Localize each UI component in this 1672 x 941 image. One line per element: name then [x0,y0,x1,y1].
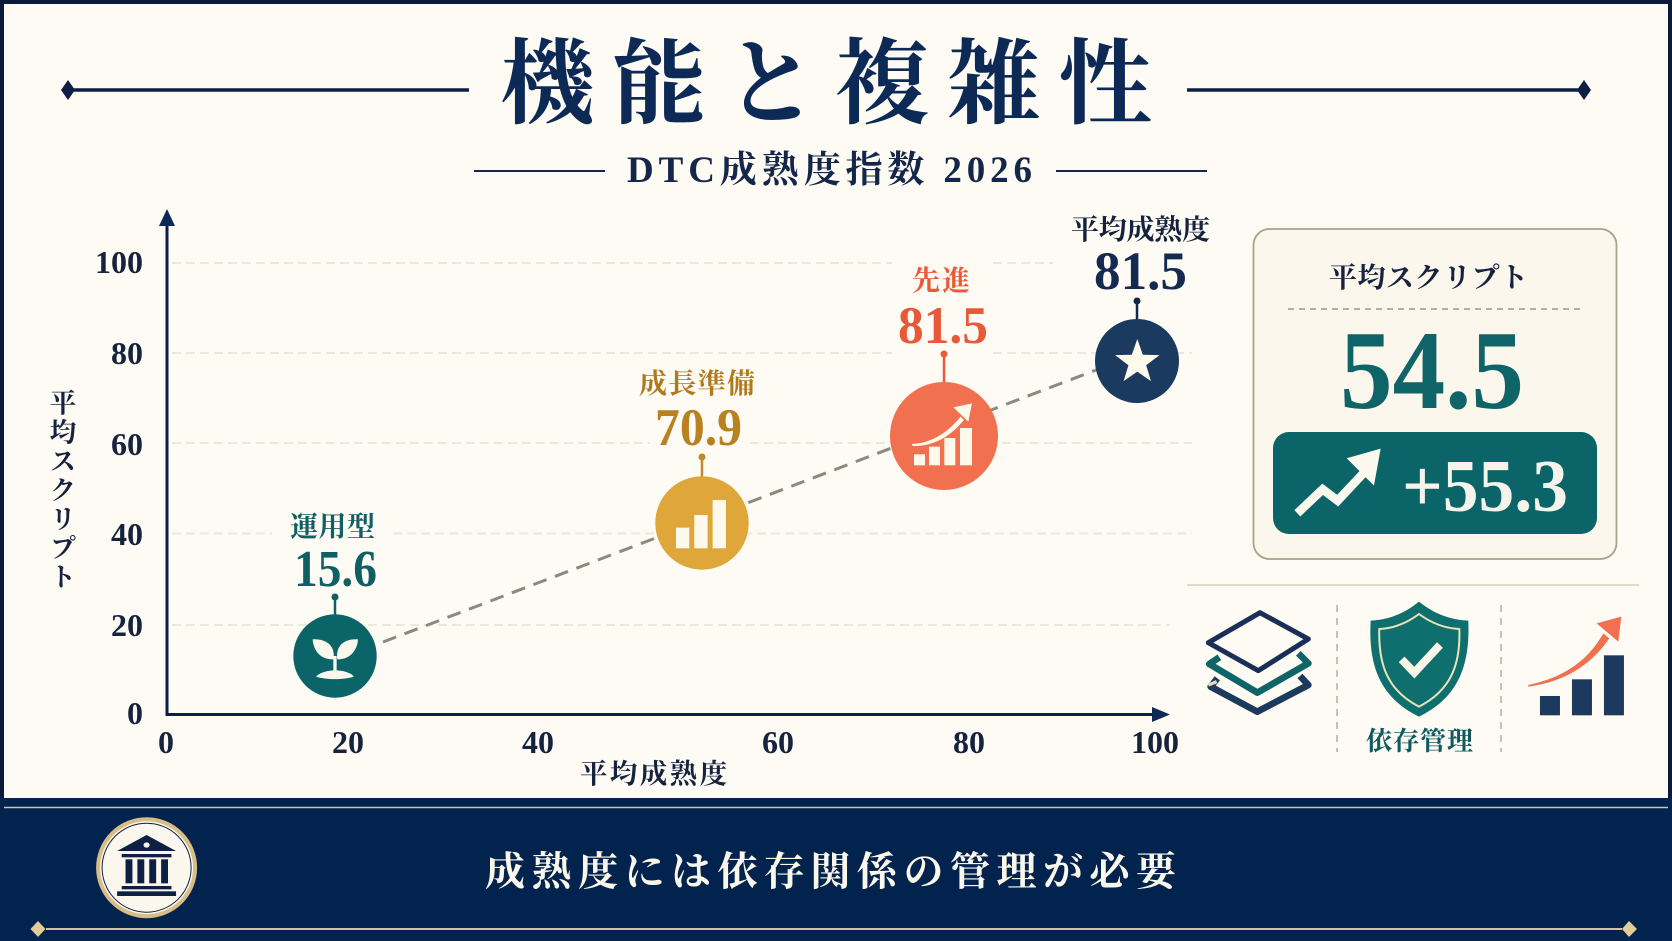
x tick labels: 20 [332,724,364,760]
icon: stacked layers [1208,613,1308,712]
label: operational: 運用型 [290,505,375,545]
y tick labels: 40 [111,516,143,552]
x tick labels: 100 [1131,724,1179,760]
y tick labels: 60 [111,426,143,462]
trend line [383,370,1096,642]
x axis title: 平均成熟度 [580,751,727,791]
y tick labels: 80 [111,335,143,371]
y tick labels: 20 [111,607,143,643]
y tick labels: 0 [127,695,143,731]
icon: trend arrow [1297,449,1381,513]
x tick labels: 60 [762,724,794,760]
icon: institution [98,819,195,916]
panel: average scripts [1254,229,1616,559]
footer banner [0,798,1672,941]
marker: growth ready [639,362,755,570]
delta badge [1273,432,1597,534]
x tick labels: 80 [953,724,985,760]
icon: star [1115,339,1160,381]
label: advanced: 先進 [912,259,970,299]
y axis title: 平均スクリプト [44,389,82,592]
subtitle rules [474,170,1207,172]
y tick labels: 100 [95,244,143,280]
title rule left [61,80,469,100]
value: operational: 15.6 [294,541,377,598]
icon: sprout [313,639,358,679]
title: 機能と複雑性 [501,9,1152,143]
label: growth ready: 成長準備 [639,362,755,402]
panel value: 54.5 [1340,309,1524,433]
label: dependency management: 依存管理 [1366,721,1473,758]
icon: shield [1370,602,1468,717]
marker: advanced [890,259,998,490]
y axis [159,209,175,716]
marker: average maturity [1071,208,1210,403]
icon: shield with label [1366,602,1473,758]
chart: maturity versus scripts [44,208,1210,791]
value: average maturity: 81.5 [1094,241,1187,301]
icon: growth chart [1528,617,1624,715]
icon: bars [676,500,726,548]
x tick labels: 40 [522,724,554,760]
icon: rising bars [912,403,972,465]
title rule right [1187,80,1591,100]
subtitle: DTC成熟度指数 2026 [627,149,1032,191]
delta value: +55.3 [1402,446,1568,528]
footer message: 成熟度には依存関係の管理が必要 [485,840,1178,897]
label: average maturity: 平均成熟度 [1071,208,1210,248]
x axis [166,707,1170,722]
value: advanced: 81.5 [898,297,988,355]
y tick labels [95,244,143,731]
marker: operational [290,505,377,698]
value: growth ready: 70.9 [655,399,742,457]
x tick labels [158,724,1179,760]
panel heading: 平均スクリプト [1329,256,1528,296]
x tick labels: 0 [158,724,174,760]
